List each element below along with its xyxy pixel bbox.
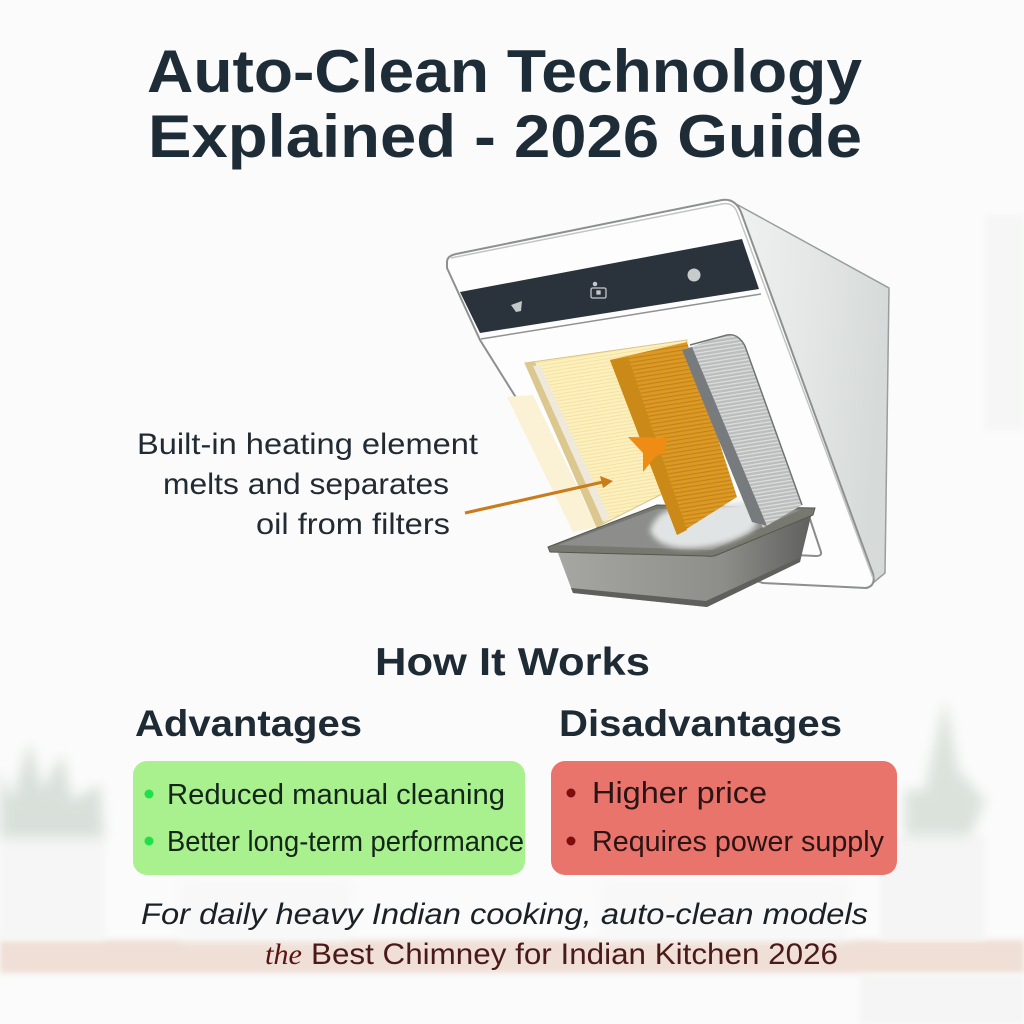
grey filter	[682, 335, 802, 528]
icon: right button	[688, 268, 700, 282]
icon: filter button	[591, 282, 606, 298]
orange filter	[610, 342, 737, 535]
title: Explained - 2026 Guide	[148, 103, 862, 170]
text: reduced manual cleaning: Reduced manual cleaning	[167, 779, 505, 811]
heading: advantages: Advantages	[135, 703, 362, 744]
orange heat arrow	[628, 437, 667, 472]
heading: how it works: How It Works	[375, 641, 650, 684]
title: Auto-Clean Technology	[147, 38, 863, 105]
chimney illustration	[447, 200, 889, 607]
hood side panel	[700, 205, 889, 588]
title	[147, 38, 863, 170]
faded filter ghost	[507, 395, 597, 532]
bullet: reduced manual cleaning	[144, 790, 154, 798]
callout text: oil from filters	[256, 508, 450, 541]
conclusion text	[141, 898, 868, 971]
conclusion text: Best Chimney for Indian Kitchen 2026	[311, 938, 838, 971]
callout arrow	[465, 476, 613, 513]
callout text: Built-in heating element	[137, 428, 479, 461]
text: higher price: Higher price	[592, 775, 767, 810]
tray support	[795, 510, 821, 556]
oil collection tray	[548, 500, 815, 607]
control panel	[460, 239, 761, 339]
bullet: higher price	[566, 788, 576, 798]
text: better performance: Better long-term performance	[167, 826, 524, 858]
bullet: power supply	[566, 836, 576, 846]
callout text: melts and separates	[163, 468, 449, 501]
bullet: better performance	[144, 836, 154, 846]
text: power supply: Requires power supply	[592, 826, 884, 858]
conclusion text: For daily heavy Indian cooking, auto-clean models	[141, 898, 868, 931]
yellow filter	[525, 340, 687, 527]
icon: left button	[511, 301, 522, 312]
panel: disadvantages	[551, 761, 897, 875]
conclusion text: the	[265, 938, 302, 971]
panel: advantages	[133, 761, 525, 875]
hood front panel	[447, 200, 874, 588]
heading: disadvantages: Disadvantages	[559, 703, 842, 744]
callout text	[137, 428, 479, 541]
oil residue	[650, 500, 758, 548]
